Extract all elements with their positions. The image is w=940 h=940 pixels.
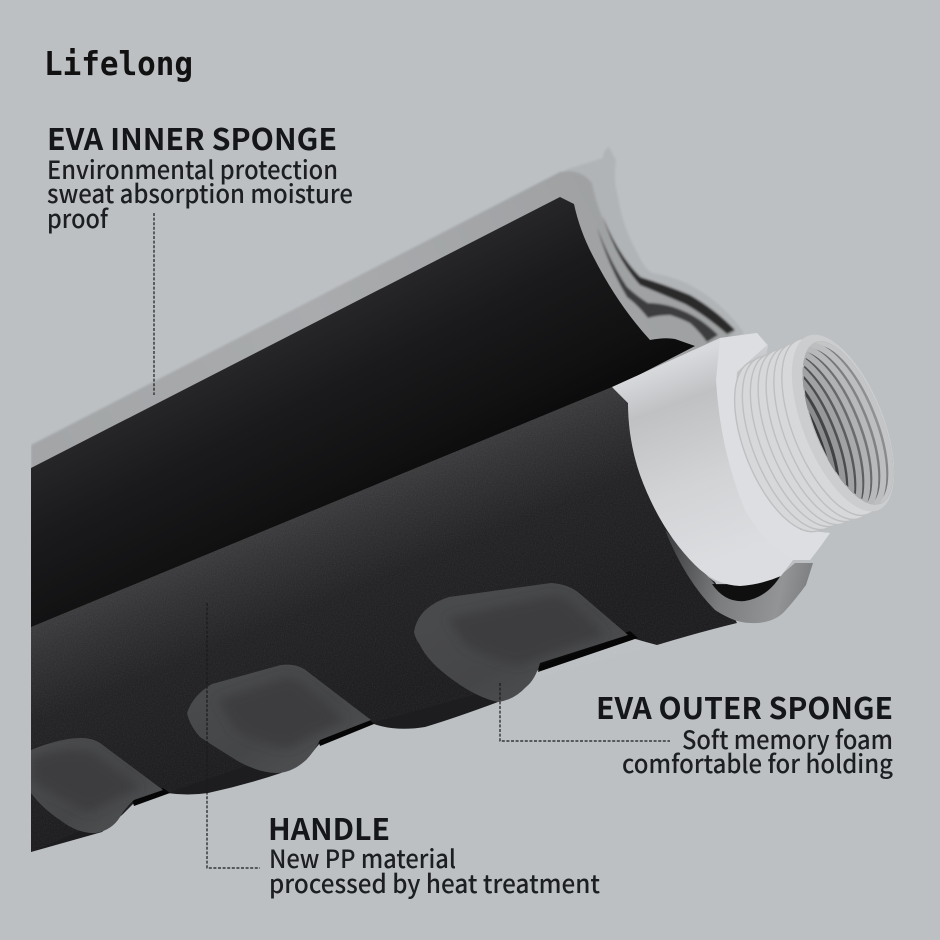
outer shell layers, cut section [31,147,744,500]
callout line: handle [207,603,260,868]
description: EVA inner sponge [47,151,353,236]
foam grain texture [31,387,737,852]
logo: Lifelong [44,44,193,83]
heading: EVA outer sponge: EVA OUTER SPONGE [596,684,893,728]
slits under handle [132,631,638,806]
grip bump 3 [414,583,628,702]
heading: handle: HANDLE [268,805,390,849]
collar shoulder ring [716,333,830,560]
heading block: EVA inner sponge [47,115,353,236]
panel: EVA inner sponge black foam [31,197,695,630]
description: EVA inner sponge: Environmental protection [47,151,338,187]
callout line: EVA outer sponge [500,683,670,741]
callout line: EVA inner sponge [153,213,155,395]
grey rim of outer sponge [665,530,813,623]
description: EVA outer sponge [622,721,894,781]
description: handle: New PP material [269,840,456,876]
white collar [612,336,800,586]
grip bump 1 [31,738,163,833]
grip bump 2 [187,665,371,773]
heading: EVA inner sponge: EVA INNER SPONGE [47,115,337,159]
panel: EVA outer sponge foam [31,387,737,852]
thread mouth rim [792,334,894,512]
description: EVA inner sponge: proof [47,200,109,236]
description: EVA outer sponge: comfortable for holding [622,745,894,781]
threaded neck [734,334,894,532]
description: handle [269,840,600,901]
description: handle: processed by heat treatment [269,865,600,901]
description: EVA outer sponge: Soft memory foam [682,721,893,757]
description: EVA inner sponge: sweat absorption moisture [47,175,353,211]
heading block: EVA outer sponge [596,684,894,781]
dark gap inside rim [712,575,781,601]
heading block: handle [268,805,600,901]
thread interior [802,341,894,505]
handle product illustration [31,147,915,852]
